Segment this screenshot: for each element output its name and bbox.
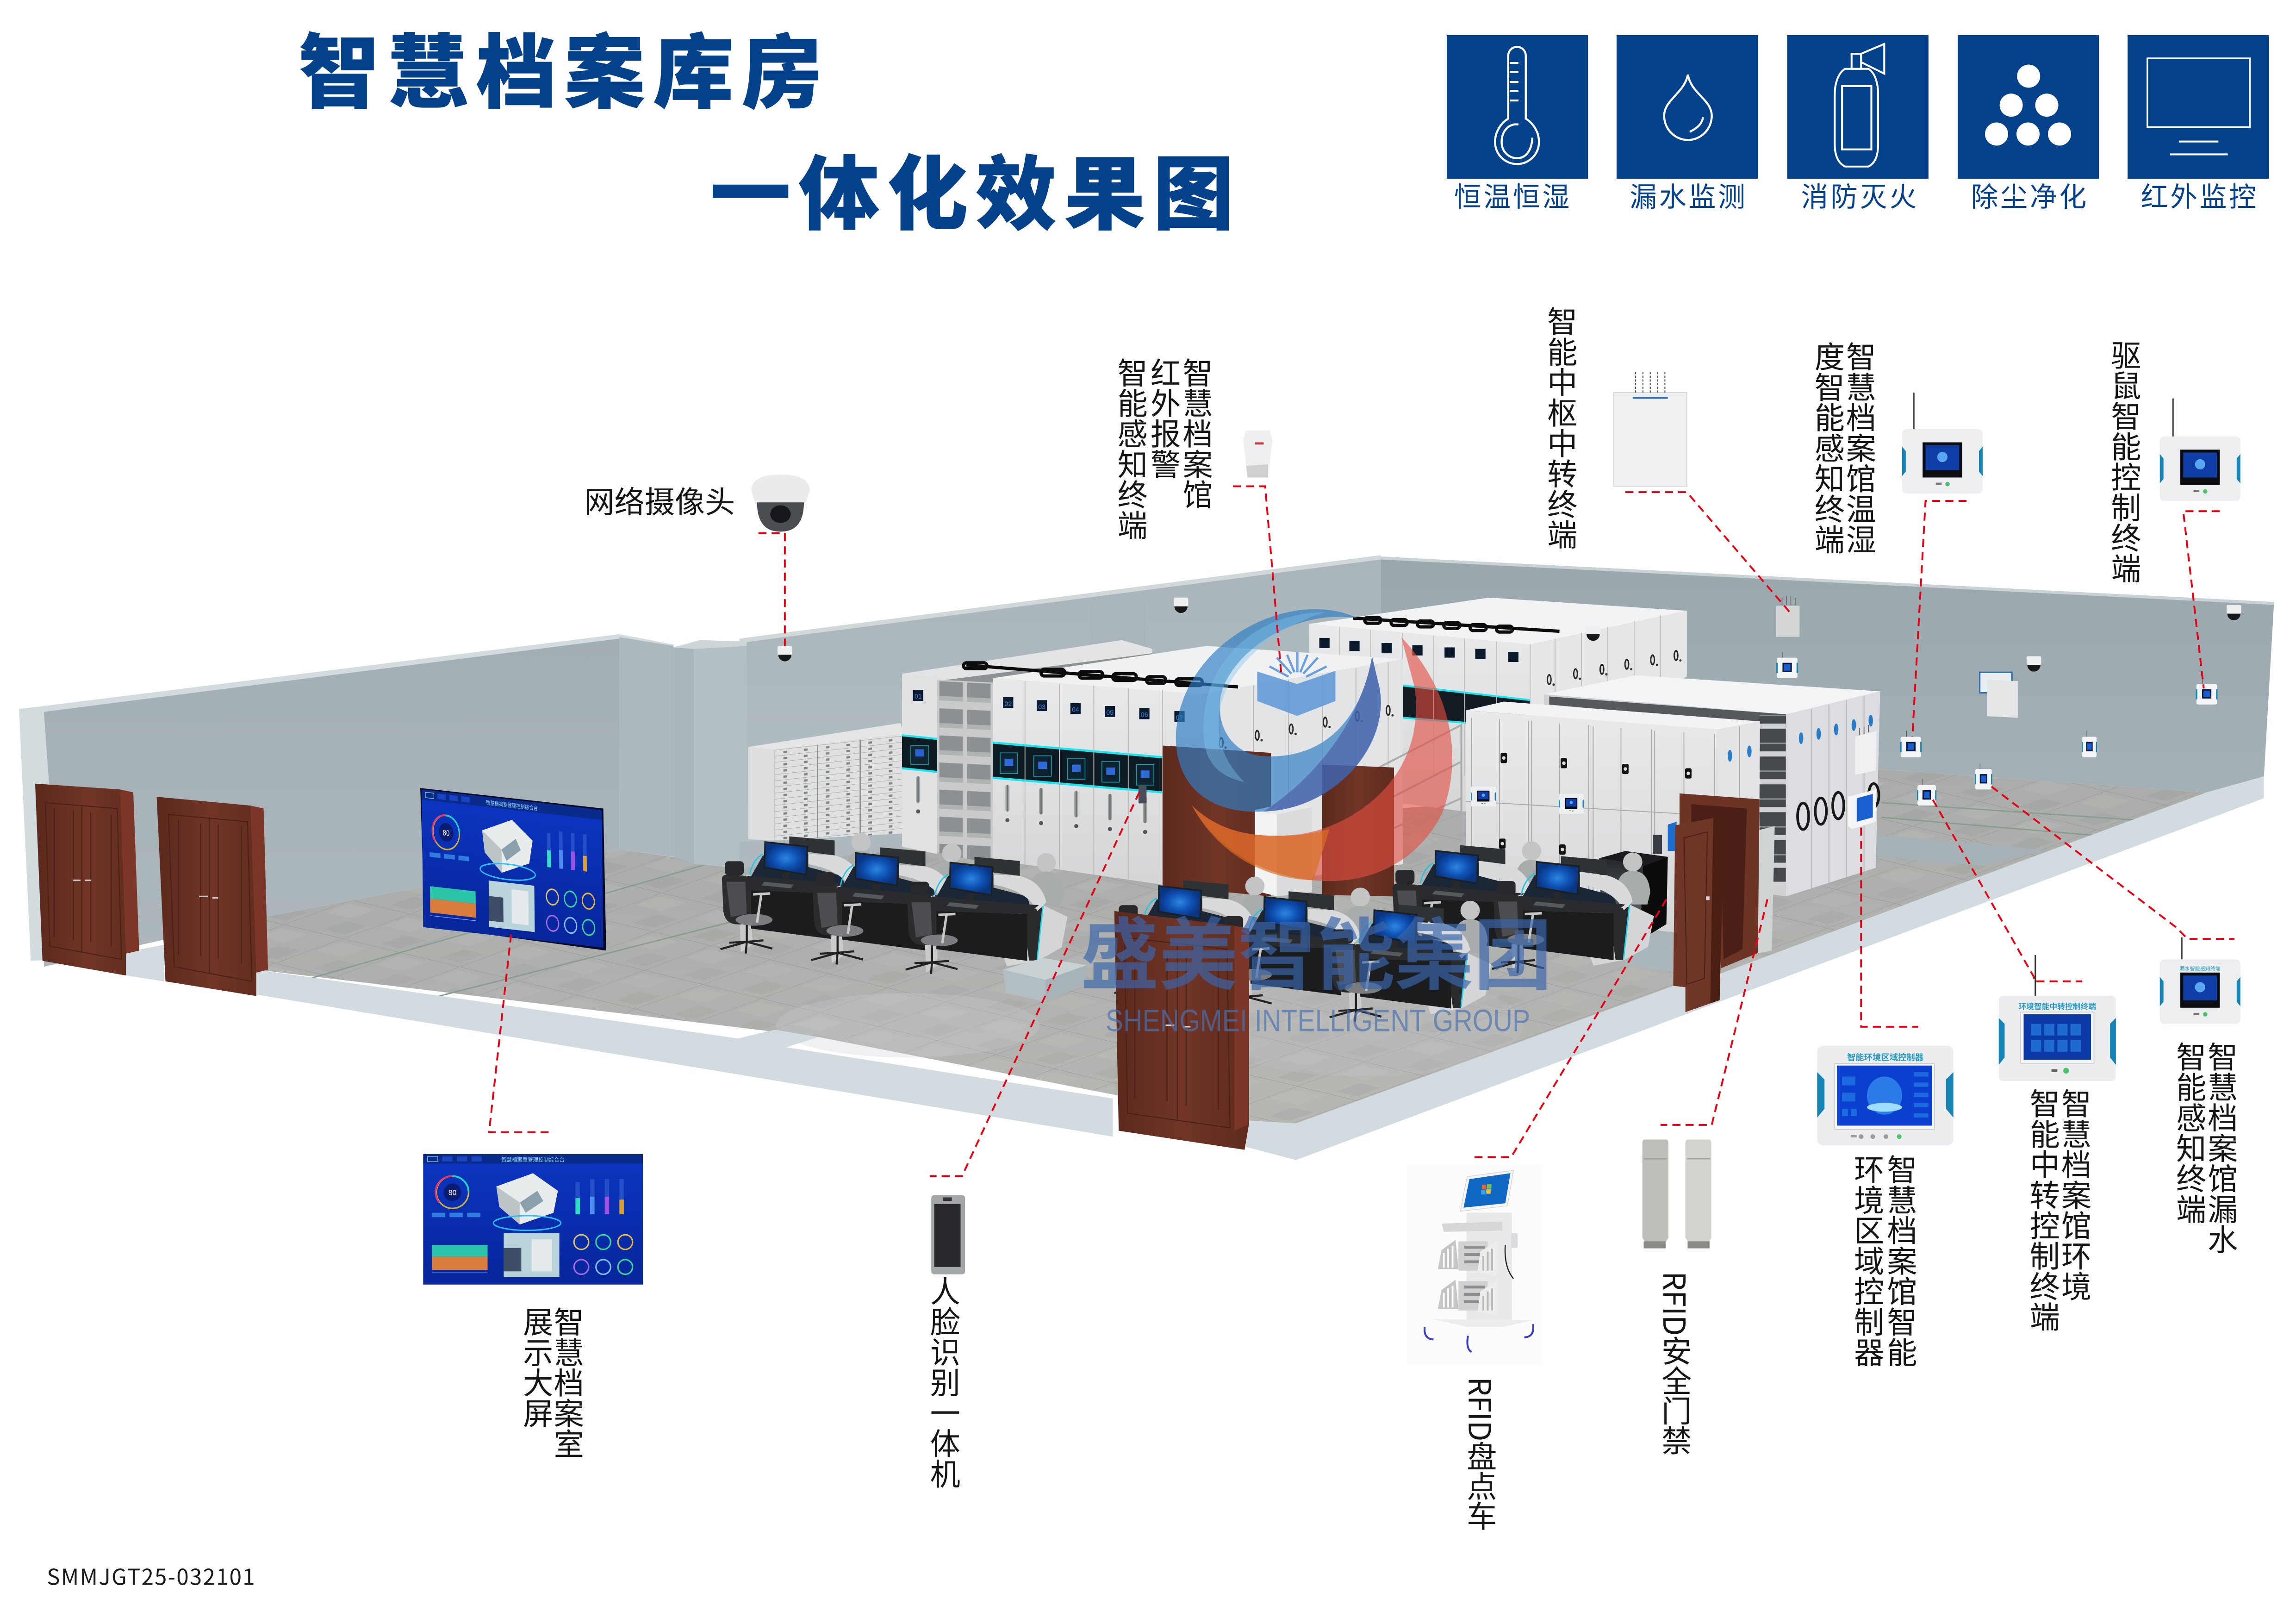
device: environment transit terminal: 环境智能中转控制终端 xyxy=(2019,1002,2096,1011)
title: 智慧档案库房 xyxy=(299,28,830,118)
icon: monitor xyxy=(2128,35,2269,179)
device: network camera xyxy=(751,475,810,532)
label: 消防灭火: 消防灭火 xyxy=(1801,182,1919,212)
label: water leak terminal: 智能感知终端 xyxy=(2169,1042,2213,1224)
device: rodent control terminal xyxy=(2160,399,2240,501)
wall-mounted hub xyxy=(1776,596,1799,637)
watermark company name: SHENGMEI INTELLIGENT GROUP xyxy=(1106,1004,1530,1038)
label: water leak terminal: 智慧档案馆漏水 xyxy=(2201,1042,2245,1255)
workstation 5 xyxy=(1492,852,1654,973)
shelving end unit xyxy=(902,640,1152,864)
icon: water drop xyxy=(1617,35,1758,179)
workstation 8 xyxy=(1330,901,1491,1022)
compact shelving block B xyxy=(1309,598,1687,820)
label: water leak terminal xyxy=(2169,1042,2245,1255)
title xyxy=(299,28,1242,240)
workstation 7 xyxy=(1220,887,1378,1008)
device: face recognition terminal xyxy=(931,1195,965,1274)
label: 除尘净化: 除尘净化 xyxy=(1971,182,2089,212)
3D archive room scene xyxy=(19,555,2274,1160)
filing drawer cabinet xyxy=(740,723,903,879)
compact shelving block A: 06 xyxy=(1141,712,1148,719)
back walls xyxy=(740,555,2274,879)
workstation 2 xyxy=(811,843,970,964)
compact shelving block A: 05 xyxy=(1106,709,1114,717)
drawing code: SMMJGT25-032101 xyxy=(47,1559,255,1591)
label: network camera: 网络摄像头 xyxy=(584,485,735,519)
compact shelving block A xyxy=(964,646,1403,891)
workstation 3 xyxy=(906,853,1067,974)
device: RFID inventory cart xyxy=(1407,1164,1543,1365)
device: central hub xyxy=(1614,370,1687,486)
label: display wall xyxy=(516,1306,591,1459)
low plinth xyxy=(1003,958,1087,1002)
label: face recognition terminal: 人脸识别一体机 xyxy=(923,1276,967,1489)
label: regional controller xyxy=(1847,1154,1924,1368)
workstation 1 xyxy=(721,833,878,954)
icon: dust particles xyxy=(1958,35,2099,179)
label: environment transit terminal: 智能中转控制终端 xyxy=(2023,1088,2067,1332)
camera group xyxy=(1174,598,2241,672)
label: environment transit terminal: 智慧档案馆环境 xyxy=(2054,1088,2098,1301)
server rack xyxy=(1599,851,1668,940)
door 2 xyxy=(157,797,268,996)
label: environment transit terminal xyxy=(2023,1088,2098,1332)
structural column xyxy=(673,640,747,868)
front wall kerb xyxy=(126,776,2264,1160)
back doors and air unit xyxy=(1163,745,1394,896)
label: temperature humidity terminal xyxy=(1808,341,1883,555)
watermark company name xyxy=(1081,912,1552,1038)
alcove plinth xyxy=(1624,931,1672,972)
centre door xyxy=(1114,911,1249,1150)
label: central hub: 智能中枢中转终端 xyxy=(1540,306,1584,550)
label: infrared sensor: 智能感知终端 xyxy=(1111,357,1155,540)
metal rack xyxy=(1362,725,1462,864)
label: infrared sensor: 红外报警 xyxy=(1144,357,1188,479)
device: display wall dashboard xyxy=(423,1154,643,1285)
compact shelving block A: 07 xyxy=(1176,714,1183,722)
watermark company name: 盛美智能集团 xyxy=(1081,912,1552,999)
workstation 4 xyxy=(1391,842,1549,962)
label: temperature humidity terminal: 智慧档案馆温湿 xyxy=(1839,341,1883,555)
right door xyxy=(1673,793,1775,1012)
device: water leak terminal xyxy=(2160,937,2240,1024)
cabinet block D xyxy=(1466,702,1760,937)
compact shelving block A: 02 xyxy=(1004,700,1012,708)
label: regional controller: 环境区域控制器 xyxy=(1847,1154,1891,1368)
wall camera A xyxy=(778,646,792,662)
watermark logo xyxy=(1176,609,1452,881)
label: display wall: 智慧档案室 xyxy=(547,1306,591,1459)
compact shelving block C xyxy=(1544,675,1880,896)
label: regional controller: 智慧档案馆智能 xyxy=(1880,1154,1924,1368)
feature icons row xyxy=(1447,35,2269,212)
callout lines xyxy=(489,486,2234,1176)
label: temperature humidity terminal: 度智能感知终端 xyxy=(1808,341,1852,555)
device: RFID security gates xyxy=(1643,1140,1711,1249)
compact shelving block A: 03 xyxy=(1038,703,1045,711)
label: RFID inventory cart: RFID盘点车 xyxy=(1460,1377,1504,1530)
title: 一体化效果图 xyxy=(710,150,1242,240)
door 1 xyxy=(35,784,139,975)
label: 红外监控: 红外监控 xyxy=(2141,182,2259,212)
workstations xyxy=(721,833,1654,1022)
wall-mounted control box xyxy=(1980,672,2018,718)
device: water leak terminal: 漏水智能感知终端 xyxy=(2180,965,2221,972)
label: 恒温恒湿: 恒温恒湿 xyxy=(1454,182,1572,212)
label: infrared sensor xyxy=(1111,357,1220,540)
label: rodent control terminal: 驱鼠智能控制终端 xyxy=(2104,340,2148,583)
compact shelving block A: 04 xyxy=(1072,706,1079,714)
label: infrared sensor: 智慧档案馆 xyxy=(1176,357,1220,510)
device: environment transit terminal xyxy=(1999,955,2116,1081)
workstation 6 xyxy=(1114,877,1272,998)
icon: fire extinguisher xyxy=(1787,35,1929,179)
shelving end unit: 01 xyxy=(915,693,922,700)
wall-mounted sensors xyxy=(1776,652,2217,806)
icon: thermometer xyxy=(1447,35,1588,179)
device: regional controller xyxy=(1817,1046,1954,1145)
label: 漏水监测: 漏水监测 xyxy=(1630,182,1748,212)
device: infrared sensor xyxy=(1243,431,1272,477)
label: display wall: 展示大屏 xyxy=(516,1306,560,1428)
left outer wall xyxy=(19,634,673,967)
floor xyxy=(256,769,2207,1124)
device: regional controller: 智能环境区域控制器 xyxy=(1847,1053,1924,1062)
alcove wall xyxy=(1876,835,2048,866)
device: temperature humidity terminal xyxy=(1902,393,1983,493)
label: RFID security gates: RFID安全门禁 xyxy=(1655,1271,1699,1455)
callout line: camera xyxy=(759,533,785,646)
wall display screen xyxy=(420,788,606,950)
